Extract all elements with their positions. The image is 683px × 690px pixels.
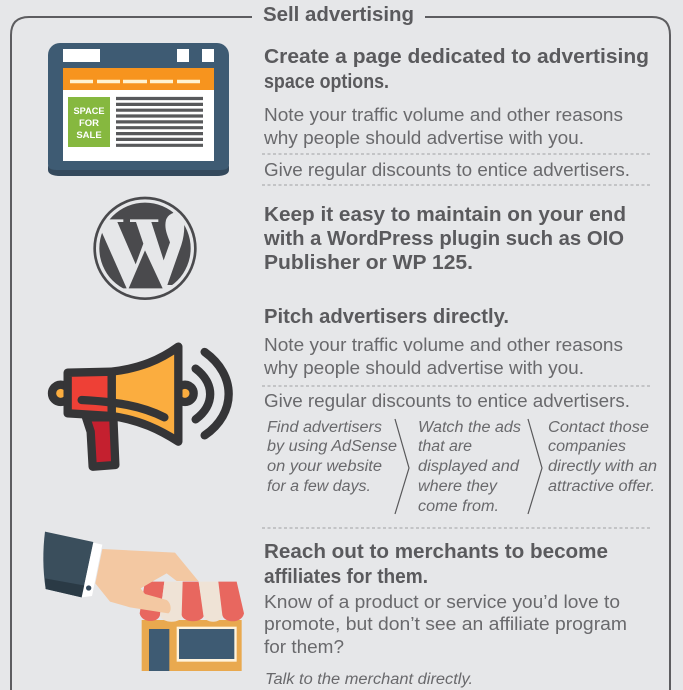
heading: reach out to merchants: affiliates for them. — [264, 566, 428, 588]
heading: wordpress plugin — [263, 204, 626, 274]
steps: watch the ads — [418, 419, 521, 515]
steps: contact companies — [548, 419, 657, 495]
text: merchant note — [264, 592, 627, 657]
icon: hand and storefront — [43, 532, 244, 671]
steps: watch the ads: come from. — [418, 498, 499, 515]
text: traffic note — [263, 105, 623, 148]
title: Sell advertising — [263, 4, 414, 26]
steps: contact companies: companies — [548, 438, 626, 455]
text: merchant note: Know of a product or service you’d love to — [264, 592, 620, 612]
text: talk to the merchant: Talk to the merchant directly. — [265, 671, 473, 688]
heading: create a page: space options. — [264, 71, 389, 93]
steps: find advertisers — [267, 419, 397, 495]
heading: wordpress plugin: Publisher or WP 125. — [264, 252, 473, 274]
heading: reach out to merchants: Reach out to merchants to become — [264, 541, 608, 563]
icon: browser page with ad space: FOR — [79, 118, 99, 129]
arrow: chevron 2 — [528, 419, 542, 514]
steps: watch the ads: displayed and — [418, 458, 520, 475]
arrow: chevron 1 — [395, 419, 409, 514]
steps: find advertisers: for a few days. — [267, 478, 371, 495]
icon: megaphone — [52, 347, 229, 467]
steps: contact companies: Contact those — [548, 419, 649, 436]
steps: watch the ads: that are — [418, 438, 472, 455]
steps: watch the ads: where they — [418, 478, 498, 495]
steps: find advertisers: by using AdSense — [267, 438, 397, 455]
text: discounts: Give regular discounts to entice advertisers. — [264, 160, 630, 180]
heading: create a page — [264, 46, 649, 93]
icon: browser page with ad space: SALE — [76, 130, 102, 141]
text: merchant note: for them? — [264, 637, 344, 657]
steps: contact companies: directly with an — [548, 458, 657, 475]
steps: contact companies: attractive offer. — [548, 478, 655, 495]
heading: reach out to merchants — [264, 541, 608, 588]
text: traffic note: Note your traffic volume and other reasons — [264, 105, 623, 125]
text: merchant note: promote, but don’t see an affiliate program — [264, 614, 627, 634]
heading: wordpress plugin: with a WordPress plugin such as OIO — [263, 228, 624, 250]
heading: create a page: Create a page dedicated to advertising — [264, 46, 649, 68]
icon: browser page with ad space — [48, 43, 229, 176]
icon: browser page with ad space: SPACE — [74, 106, 104, 117]
text: traffic note: why people should advertise with you. — [263, 128, 584, 148]
text: traffic note 2: why people should advertise with you. — [263, 358, 584, 378]
heading: pitch advertisers: Pitch advertisers directly. — [264, 306, 509, 328]
heading: wordpress plugin: Keep it easy to maintain on your end — [264, 204, 626, 226]
steps: watch the ads: Watch the ads — [418, 419, 521, 436]
text: traffic note 2 — [263, 335, 623, 378]
icon: wordpress logo — [93, 195, 197, 300]
text: discounts 2: Give regular discounts to entice advertisers. — [264, 391, 630, 411]
steps: find advertisers: Find advertisers — [267, 419, 382, 436]
text: traffic note 2: Note your traffic volume and other reasons — [264, 335, 623, 355]
steps: find advertisers: on your website — [267, 458, 382, 475]
